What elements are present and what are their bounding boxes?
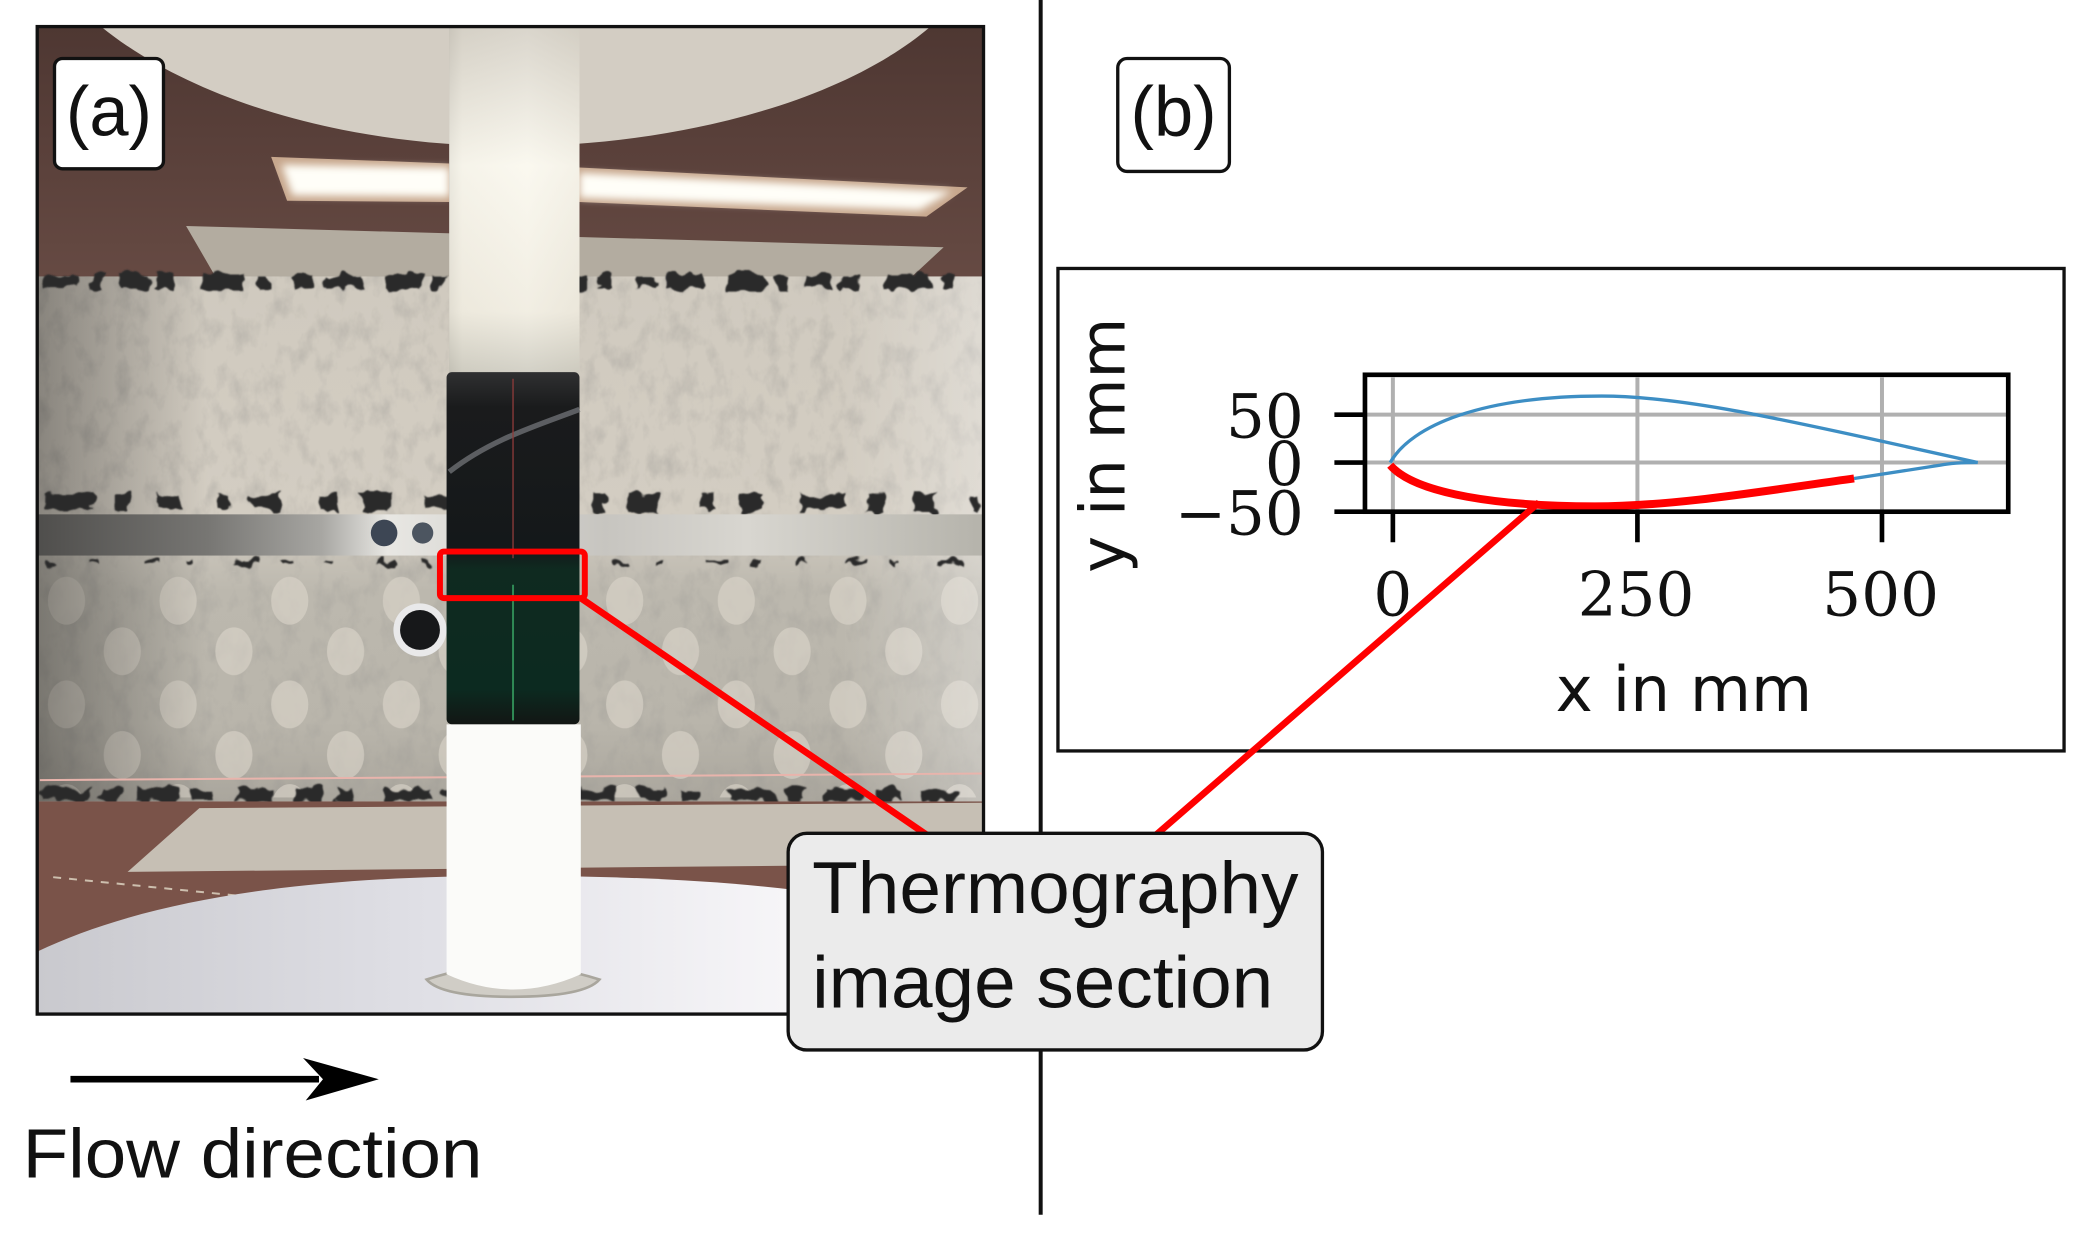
red leader line from chart to callout bbox=[1156, 502, 1539, 835]
flow direction arrow bbox=[70, 1058, 379, 1100]
label (b): (b) bbox=[1131, 72, 1217, 151]
plot grid bbox=[1366, 377, 2007, 510]
y axis tick labels: 0 bbox=[1265, 429, 1304, 500]
red measured section bbox=[1390, 465, 1854, 506]
x axis tick labels: 250 bbox=[1578, 559, 1694, 630]
x axis title: x in mm bbox=[1556, 653, 1812, 726]
y axis title: y in mm bbox=[1066, 318, 1139, 573]
y axis tick labels: 50 bbox=[1226, 381, 1304, 452]
plot axes and ticks bbox=[1334, 375, 2008, 542]
flow direction label: Flow direction bbox=[23, 1115, 482, 1193]
photo frame bbox=[37, 27, 984, 1014]
red leader line from photo to callout bbox=[581, 598, 926, 835]
callout: thermography image section: Thermography bbox=[812, 848, 1299, 929]
callout: thermography image section: image section bbox=[812, 942, 1273, 1023]
panel b: airfoil profile chart bbox=[1058, 268, 2064, 751]
callout: thermography image section bbox=[788, 833, 1322, 1050]
x axis tick labels: 500 bbox=[1822, 559, 1939, 630]
label (a) bbox=[54, 58, 163, 169]
x axis tick labels: 0 bbox=[1373, 559, 1412, 630]
airfoil blue outline bbox=[1390, 396, 1978, 478]
label (b) bbox=[1118, 58, 1229, 171]
divider between panels bbox=[1039, 0, 1042, 1215]
y axis tick labels bbox=[1175, 381, 1304, 549]
thermography region marker on cylinder bbox=[440, 552, 585, 598]
y axis tick labels: −50 bbox=[1175, 478, 1304, 549]
label (a): (a) bbox=[66, 72, 152, 151]
panel a: wind tunnel photograph bbox=[37, 27, 984, 1014]
photo of airfoil in wind tunnel bbox=[37, 27, 984, 1014]
x axis tick labels bbox=[1373, 559, 1939, 630]
